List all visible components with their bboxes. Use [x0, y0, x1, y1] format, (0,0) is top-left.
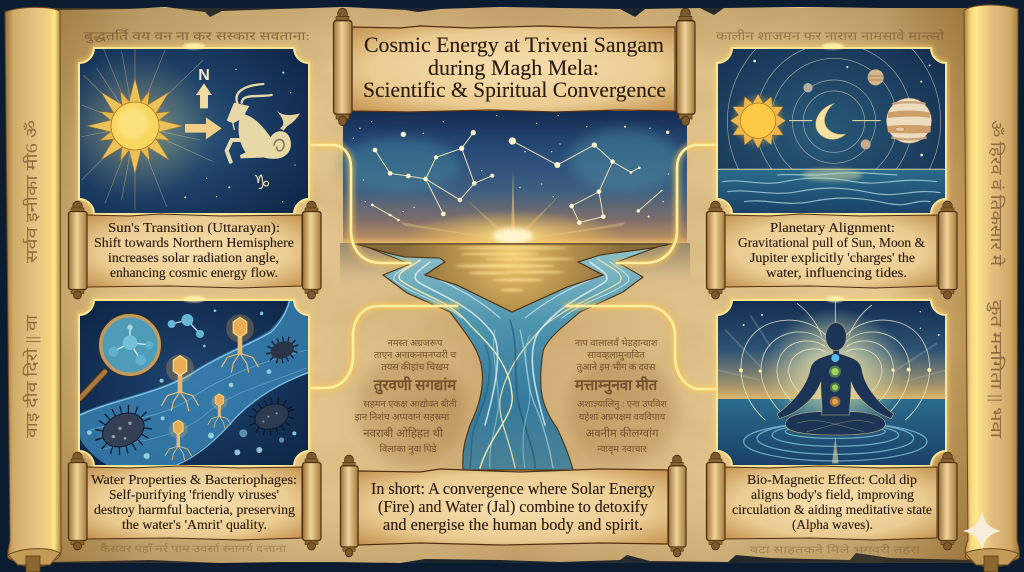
orbits	[727, 49, 941, 170]
center-left sanskrit block: ताएन अनाकनमनप्वरी च	[374, 349, 457, 361]
text: aligns body's field, improving	[751, 488, 914, 503]
banner: bio-magnetic effect	[706, 452, 957, 550]
center-left sanskrit block: नवराबी ओहिहत थी	[363, 426, 444, 440]
sea	[717, 169, 947, 216]
river confluence	[355, 244, 672, 470]
text: Self-purifying 'friendly viruses'	[109, 488, 279, 503]
title text: during Magh Mela:	[428, 55, 599, 80]
north arrow	[196, 83, 212, 108]
bubbles	[87, 309, 296, 459]
center-right sanskrit block: अवनीम कीलग्वांग	[586, 426, 659, 440]
right scroll vertical script upper: ॐ हिरव वं तिकसार मे	[987, 120, 1006, 266]
left title roller	[334, 8, 352, 126]
title scroll	[334, 8, 695, 126]
text: Bio-Magnetic Effect: Cold dip	[747, 473, 917, 488]
text: increases solar radiation angle,	[108, 251, 279, 266]
banner: water properties	[68, 452, 321, 550]
jupiter	[886, 98, 932, 143]
text: (Alpha waves).	[792, 518, 873, 533]
center-right sanskrit block: तुआने इम भीग क दवस	[577, 361, 656, 373]
text: and energise the human body and spirit.	[383, 515, 643, 534]
golden connectors	[308, 145, 717, 389]
text	[91, 473, 297, 533]
sand ground below horizon	[340, 243, 690, 305]
ripples	[744, 422, 927, 461]
right side scroll	[963, 5, 1019, 572]
constellation lines	[372, 133, 662, 223]
banner: in short summary	[340, 455, 686, 557]
panel: bacteriophage illustration	[79, 296, 310, 466]
sun rays	[82, 48, 213, 210]
sun	[730, 94, 786, 148]
text	[738, 221, 925, 281]
footer script bottom left: कैसवर पहाँ नर्र पाम उवर्सा स्नानर्य दत्ताना	[100, 543, 287, 555]
right scroll vertical script lower: कुत मनगिता || भवा	[986, 300, 1006, 439]
north label: N	[198, 67, 210, 84]
center-left sanskrit block	[355, 339, 457, 455]
text: Water Properties & Bacteriophages:	[91, 473, 297, 488]
center-right sanskrit block: मत्ताम्नुनवा मीत	[574, 376, 659, 395]
center-left sanskrit block: तुरवणी सगद्यांम	[373, 376, 457, 395]
footer script bottom right: वटा साहतकने मिले भगवरी तहरा	[750, 544, 921, 556]
center-left sanskrit block: इान निशंच अप्पवानं सहस्रमां	[355, 411, 450, 423]
left summary roller	[340, 455, 358, 557]
chakras	[829, 354, 841, 407]
title text: Cosmic Energy at Triveni Sangam	[364, 32, 664, 57]
banner: planetary alignment	[706, 201, 957, 299]
text: Jupiter explicitly 'charges' the	[750, 251, 915, 266]
field lines	[741, 300, 930, 420]
reflected sunlight	[455, 246, 575, 292]
central sky panel with constellations	[340, 111, 687, 262]
left side scroll	[5, 7, 61, 572]
meditating figure	[777, 323, 894, 435]
center-left sanskrit block: विलाका नुवा पिडे	[379, 443, 437, 455]
small planets	[803, 83, 813, 92]
panel: planetary alignment illustration	[713, 42, 950, 216]
text: circulation & aiding meditative state	[732, 503, 932, 518]
title text: Scientific & Spiritual Convergence	[363, 77, 666, 102]
center-left sanskrit block: सहमन एकक्ष आद्योक्त बीती	[363, 398, 457, 410]
water stream	[80, 300, 310, 465]
text: the water's 'Amrit' quality.	[122, 518, 267, 533]
stars	[353, 115, 669, 225]
sun spikes	[87, 78, 183, 174]
right summary roller	[668, 455, 686, 557]
stars	[753, 60, 931, 156]
title text	[363, 32, 666, 102]
left scroll vertical script lower: वाइ दीव दिरो || वा	[22, 314, 41, 438]
center-right sanskrit block: न्यावृम नवाचार	[597, 445, 648, 455]
center-right sanskrit block: सावव्हलामुनावित	[587, 349, 645, 361]
sparkle	[963, 512, 1001, 550]
floating molecule	[175, 320, 198, 332]
center-right sanskrit block	[574, 337, 668, 455]
header script top left: बुद्धतर्ति वय वन ना कर सस्कार सवताना:	[84, 29, 310, 44]
bacteria	[97, 338, 296, 453]
sky beams	[717, 315, 947, 382]
text: Gravitational pull of Sun, Moon &	[738, 236, 925, 251]
center-left sanskrit block: तयस कीहांच चिखम	[381, 361, 449, 373]
left scroll vertical script upper: सर्वव इनीका मी6 ॐ	[22, 120, 41, 263]
phages	[166, 314, 254, 439]
magnifying glass	[80, 314, 161, 398]
text	[371, 479, 655, 534]
panel: bio-magnetic meditation illustration	[717, 296, 947, 466]
text: (Fire) and Water (Jal) combine to detoxify	[378, 497, 648, 516]
text	[732, 473, 932, 533]
arrow to capricorn	[185, 117, 222, 139]
sand island	[355, 244, 672, 312]
crescent moon	[816, 103, 846, 139]
text	[94, 221, 294, 281]
center-left sanskrit block: नमस्त अग्रजरूप	[388, 339, 443, 349]
center-right sanskrit block: नाप वालालर्वं भेडहान्वाश	[575, 337, 658, 349]
capricorn symbol: ♑	[253, 170, 271, 194]
center-right sanskrit block: अशाज्ञ्यालिनु : एना उपविश	[577, 398, 668, 410]
text: water, influencing tides.	[766, 266, 907, 281]
right title roller	[676, 8, 695, 126]
small stars	[184, 69, 296, 202]
text: Sun's Transition (Uttarayan):	[108, 221, 280, 236]
capricorn figure	[227, 84, 300, 162]
text: In short: A convergence where Solar Energy	[371, 479, 655, 498]
header script top right: कालीन शाजमन फर नारारा नामसावे मान्त्सो	[716, 29, 945, 43]
panel: sun's transition illustration	[60, 43, 309, 214]
center-right sanskrit block: यहेशां अप्रपक्षम ववविपाय	[579, 411, 666, 423]
text: Planetary Alignment:	[770, 221, 895, 236]
text: destroy harmful bacteria, preserving	[94, 503, 295, 518]
banner: sun's transition	[68, 201, 321, 299]
text: Shift towards Northern Hemisphere	[94, 236, 294, 251]
text: enhancing cosmic energy flow.	[110, 266, 278, 281]
